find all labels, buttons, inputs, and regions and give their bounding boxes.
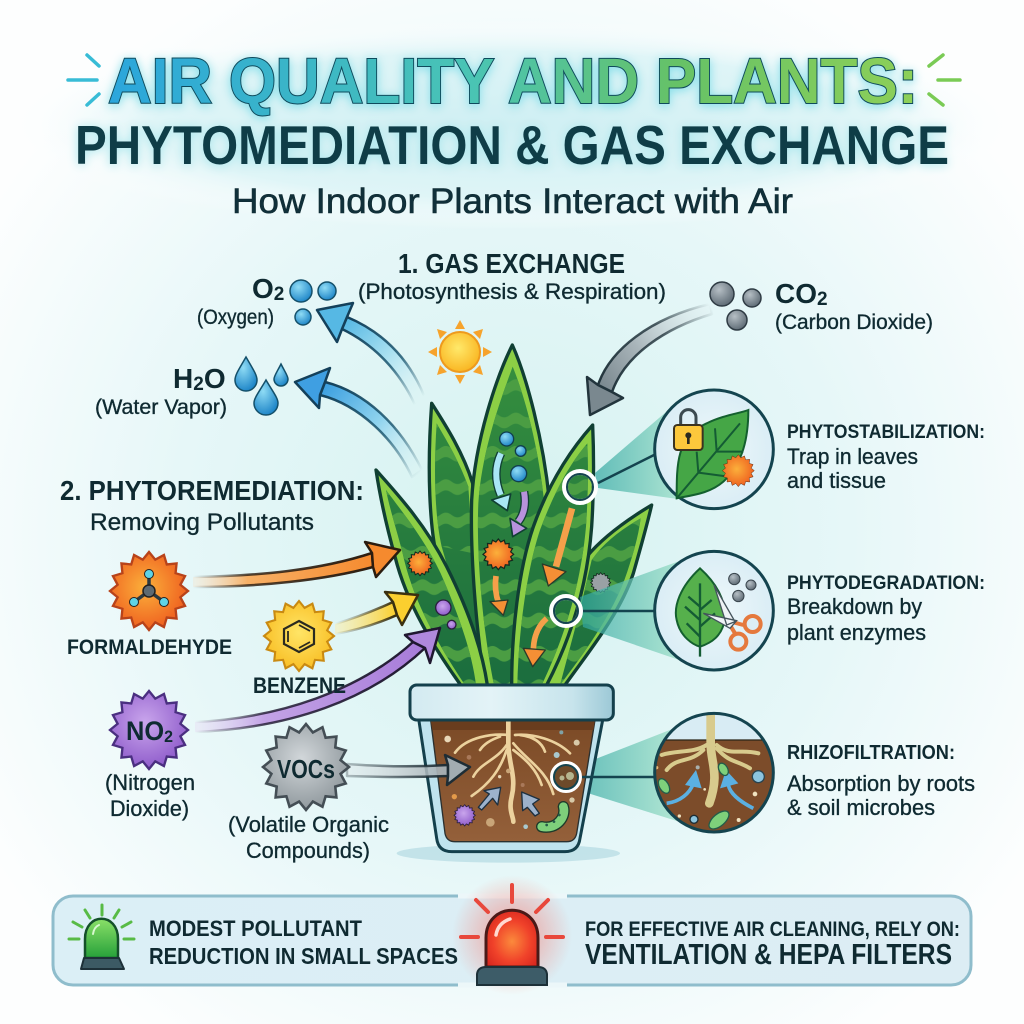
water vapor label: O (204, 363, 226, 394)
text: rhizofiltration (787, 742, 975, 820)
oxygen label: 2 (274, 284, 284, 305)
title accents (68, 55, 960, 105)
water vapor label: H (173, 363, 193, 394)
pot body (418, 717, 603, 852)
badge: nitrogen dioxide: Dioxide) (110, 796, 189, 821)
section heading: phytoremediation: Removing Pollutants (90, 509, 314, 536)
leaf: front right (512, 425, 594, 685)
badge: benzene (253, 601, 346, 698)
icon: oxygen bubbles (290, 280, 336, 325)
beam: rhizofiltration (575, 728, 680, 822)
green bacterium (542, 807, 564, 827)
icon: leaf with lock (655, 390, 773, 509)
section heading: gas exchange: (Photosynthesis & Respiration) (358, 279, 666, 304)
badge: formaldehyde (67, 552, 232, 659)
oxygen label: (Oxygen) (197, 306, 274, 329)
leaf: center (471, 345, 557, 685)
badge: benzene: BENZENE (253, 673, 346, 698)
text: phytodegradation: PHYTODEGRADATION: (787, 573, 985, 594)
loupe: soil spot (552, 763, 654, 791)
pot with soil and roots (397, 685, 620, 863)
arrow: water vapor out (295, 368, 422, 477)
beam: phytodegradation (580, 559, 688, 663)
title line 1: AIR QUALITY AND PLANTS: (108, 45, 918, 117)
loupe: leaf spot 2 (552, 597, 654, 625)
badge: VOCs: Compounds) (246, 838, 370, 863)
badge: formaldehyde: FORMALDEHYDE (67, 636, 232, 659)
soil specks (444, 730, 580, 829)
arrow: formaldehyde in (193, 542, 400, 587)
arrow: carbon dioxide in (587, 304, 712, 415)
section heading: gas exchange (358, 248, 666, 304)
icon: water drops (235, 357, 288, 415)
leaf: back left (429, 403, 485, 685)
warning text left: MODEST POLLUTANT (149, 916, 363, 941)
beam: phytostabilization (595, 400, 685, 500)
badge: nitrogen dioxide: NO (126, 716, 166, 746)
leaf: front left (376, 470, 487, 685)
text: phytostabilization: and tissue (787, 468, 886, 493)
icon: carbon dioxide bubbles (710, 282, 761, 330)
text: phytostabilization: Trap in leaves (787, 444, 918, 469)
badge: nitrogen dioxide: 2 (164, 727, 173, 746)
carbon dioxide label: CO (775, 278, 817, 309)
carbon dioxide label: 2 (817, 289, 828, 310)
water vapor label: 2 (193, 374, 204, 395)
loupe: leaf spot 1 (565, 455, 654, 502)
text: phytodegradation (787, 573, 985, 645)
section heading: phytoremediation: 2. PHYTOREMEDIATION: (60, 475, 364, 506)
internal arrow: blue (492, 453, 511, 511)
banner border break (458, 896, 567, 985)
badge: VOCs: (Volatile Organic (228, 812, 389, 837)
text: rhizofiltration: Absorption by roots (787, 771, 975, 796)
arrow: oxygen out (317, 303, 425, 405)
icon: leaf with scissors (655, 551, 773, 670)
arrow: nitrogen dioxide in (195, 628, 440, 732)
pot shadow (397, 844, 620, 863)
text: phytostabilization: PHYTOSTABILIZATION: (787, 422, 985, 443)
section heading: gas exchange: 1. GAS EXCHANGE (398, 248, 625, 279)
oxygen label: O (252, 273, 274, 304)
icon: red beacon (452, 875, 572, 995)
carbon dioxide label: (Carbon Dioxide) (775, 311, 933, 334)
pot rim (410, 685, 613, 720)
icon: sun (428, 320, 492, 384)
text: phytodegradation: Breakdown by (787, 594, 922, 619)
water vapor label: (Water Vapor) (95, 396, 227, 419)
leaf: far right (547, 505, 652, 685)
icon: green beacon (69, 905, 134, 969)
arrow: benzene in (335, 592, 418, 634)
callout banner: VENTILATION & HEPA FILTERS (585, 939, 952, 971)
soil (431, 720, 595, 842)
bubbles in leaf (500, 432, 527, 482)
callout banner (53, 875, 971, 995)
pollutant marks in leaves (408, 539, 611, 593)
text: phytodegradation: plant enzymes (787, 620, 926, 645)
detail circles (650, 390, 780, 837)
warning text right: FOR EFFECTIVE AIR CLEANING, RELY ON: (585, 918, 960, 941)
text: rhizofiltration: RHIZOFILTRATION: (787, 742, 955, 764)
subtitle: How Indoor Plants Interact with Air (232, 182, 793, 221)
section heading: phytoremediation (60, 475, 364, 536)
oxygen label (197, 273, 284, 329)
arrow: VOCs in (347, 755, 470, 785)
roots (455, 722, 570, 822)
carbon dioxide label (775, 278, 933, 334)
internal arrow: purple (510, 492, 527, 537)
badge: VOCs: VOCs (277, 754, 335, 784)
icon: soil with roots (650, 713, 780, 837)
badge: nitrogen dioxide: (Nitrogen (105, 770, 195, 795)
text: phytostabilization (787, 422, 985, 493)
water vapor label (95, 363, 227, 419)
soil arrows (478, 787, 539, 816)
badge: VOCs (228, 724, 389, 863)
purple particles (436, 600, 456, 629)
callout banner: REDUCTION IN SMALL SPACES (149, 943, 458, 969)
plant (376, 345, 652, 685)
badge: nitrogen dioxide (105, 691, 195, 821)
title block (68, 45, 960, 221)
purple microbe (454, 805, 475, 826)
internal arrows: orange (490, 508, 572, 667)
text: rhizofiltration: & soil microbes (787, 795, 935, 820)
